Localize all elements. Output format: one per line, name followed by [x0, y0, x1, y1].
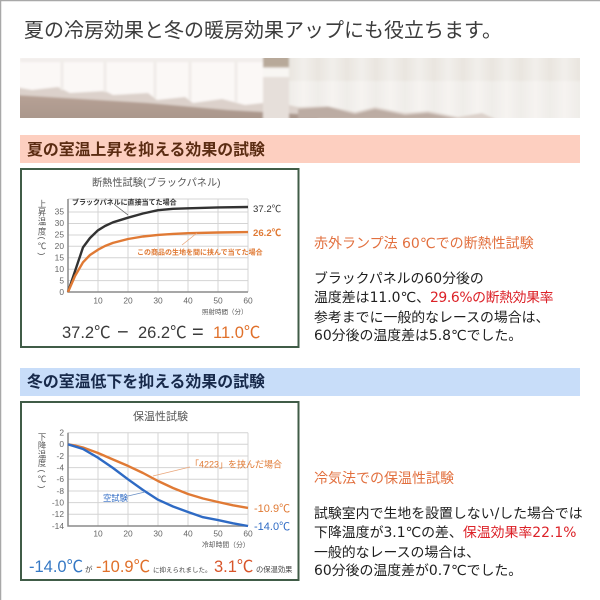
- y tick labels: 20: [55, 241, 64, 251]
- result equation: 37.2℃: [62, 324, 111, 342]
- result sentence: -14.0℃: [29, 558, 83, 576]
- line: empty test: [68, 444, 248, 526]
- heading bar: winter: 冬の室温低下を抑える効果の試験: [27, 372, 265, 391]
- value label: 26.2: 26.2℃: [253, 228, 282, 239]
- result sentence: 3.1℃: [214, 558, 253, 576]
- y tick labels: 0: [59, 439, 64, 449]
- text block: summer result: 温度差は11.0℃、29.6%の断熱効果率: [314, 290, 554, 306]
- y tick labels: 5: [59, 276, 64, 286]
- y axis label: [37, 199, 47, 256]
- chart title: 断熱性試験(ブラックパネル): [92, 176, 221, 189]
- y axis label: ): [37, 486, 47, 489]
- text block: winter result: 試験室内で生地を設置しない/した場合では: [314, 506, 583, 522]
- value label: 37.2: 37.2℃: [253, 204, 282, 215]
- text block: summer result: [314, 270, 554, 344]
- heading bar: summer: 夏の室温上昇を抑える効果の試験: [27, 141, 265, 159]
- y tick labels: -2: [57, 451, 64, 461]
- x tick labels: 60: [243, 528, 253, 538]
- annotation: this product: この商品の生地を間に挟んで当てた場合: [137, 248, 263, 256]
- text block: winter result: 下降温度が3.1℃の差、保温効果率22.1%: [314, 525, 576, 541]
- y tick labels: 0: [59, 287, 64, 297]
- result sentence: の保温効果: [256, 565, 293, 574]
- x tick labels: 20: [123, 528, 133, 538]
- annotation: empty test: [103, 492, 145, 503]
- value label: -10.9: -10.9℃: [254, 503, 290, 515]
- x tick labels: 50: [213, 528, 223, 538]
- annotation: empty test: 空試験: [103, 493, 129, 503]
- y axis label: (: [37, 237, 47, 240]
- text block: summer result: ブラックパネルの60分後の: [314, 270, 484, 287]
- grid and axes: [68, 433, 248, 526]
- annotation: this product: [137, 233, 263, 256]
- y axis label: 降: [38, 440, 47, 450]
- result sentence: に抑えられました。: [153, 565, 212, 574]
- y tick labels: 30: [55, 218, 64, 228]
- y axis label: 度: [38, 226, 47, 236]
- y tick labels: 25: [55, 230, 64, 240]
- y axis label: ℃: [38, 241, 47, 251]
- result sentence: -10.9℃: [96, 558, 150, 576]
- value label: -14.0: -14.0℃: [254, 521, 290, 533]
- text block: winter result: 60分後の温度差が0.7℃でした。: [314, 563, 522, 579]
- x tick labels: 10: [93, 296, 103, 306]
- text block: winter result: 一般的なレースの場合は、: [314, 545, 480, 561]
- result equation: [62, 322, 260, 344]
- y axis label: ℃: [38, 474, 47, 484]
- annotation: with fabric: [153, 458, 282, 476]
- grid and axes: [68, 199, 248, 292]
- x axis label: 冷却時間（分）: [202, 540, 250, 549]
- y axis label: (: [37, 470, 47, 473]
- chart title: 保温性試験: [133, 409, 188, 423]
- x tick labels: 10: [93, 528, 103, 538]
- subheading: winter test: 冷気法での保温性試験: [314, 471, 454, 487]
- heading bar: winter: [20, 368, 580, 396]
- y axis label: 昇: [38, 208, 46, 218]
- y tick labels: 2: [59, 428, 64, 438]
- x tick labels: 50: [213, 296, 223, 306]
- subheading: summer test: 赤外ランプ法 60℃での断熱性試験: [314, 236, 534, 252]
- y tick labels: 15: [55, 252, 64, 262]
- annotation: black panel: [72, 198, 177, 215]
- y axis label: 温: [38, 216, 47, 226]
- result equation: =: [192, 322, 204, 344]
- x tick labels: 40: [183, 296, 193, 306]
- result equation: 26.2℃: [138, 324, 187, 342]
- x tick labels: 30: [153, 296, 163, 306]
- y axis label: ): [37, 253, 47, 256]
- y tick labels: -4: [57, 462, 64, 472]
- text block: summer result: 参考までに一般的なレースの場合は、: [314, 310, 549, 326]
- panel: heat retention chart: [21, 402, 298, 580]
- y tick labels: -14: [52, 521, 64, 531]
- result sentence: が: [85, 564, 93, 574]
- y tick labels: -8: [57, 486, 64, 496]
- y tick labels: 10: [55, 264, 64, 274]
- x tick labels: [93, 296, 253, 306]
- x axis label: 照射時間（分）: [202, 307, 248, 316]
- y axis label: 度: [38, 458, 47, 468]
- text block: summer result: 60分後の温度差は5.8℃でした。: [314, 328, 522, 344]
- line: black panel: [68, 207, 248, 292]
- heading bar: summer: [20, 135, 580, 163]
- text block: winter result: [314, 506, 583, 579]
- title: 夏の冷房効果と冬の暖房効果アップにも役立ちます。: [24, 19, 502, 42]
- result equation: 11.0℃: [213, 324, 260, 342]
- result equation: −: [117, 322, 129, 344]
- y tick labels: [52, 428, 64, 531]
- x tick labels: 40: [183, 528, 193, 538]
- line: with fabric: [68, 444, 248, 508]
- y tick labels: -10: [52, 498, 64, 508]
- y tick labels: -12: [52, 509, 64, 519]
- x tick labels: 30: [153, 528, 163, 538]
- y tick labels: [55, 206, 64, 297]
- y tick labels: -6: [57, 474, 64, 484]
- y axis label: 温: [38, 450, 47, 460]
- y axis label: 上: [38, 199, 46, 209]
- line: this product: [68, 232, 248, 292]
- annotation: with fabric: 「4223」を挟んだ場合: [190, 458, 282, 470]
- panel: insulation chart: [21, 169, 298, 347]
- y axis label: [37, 432, 47, 489]
- x tick labels: [93, 528, 253, 538]
- y axis label: 下: [38, 432, 46, 442]
- x tick labels: 60: [243, 296, 253, 306]
- x tick labels: 20: [123, 296, 133, 306]
- y tick labels: 35: [55, 206, 64, 216]
- annotation: black panel: ブラックパネルに直接当てた場合: [72, 198, 177, 206]
- result sentence: [29, 558, 293, 576]
- photo: curtain hem: [20, 58, 580, 118]
